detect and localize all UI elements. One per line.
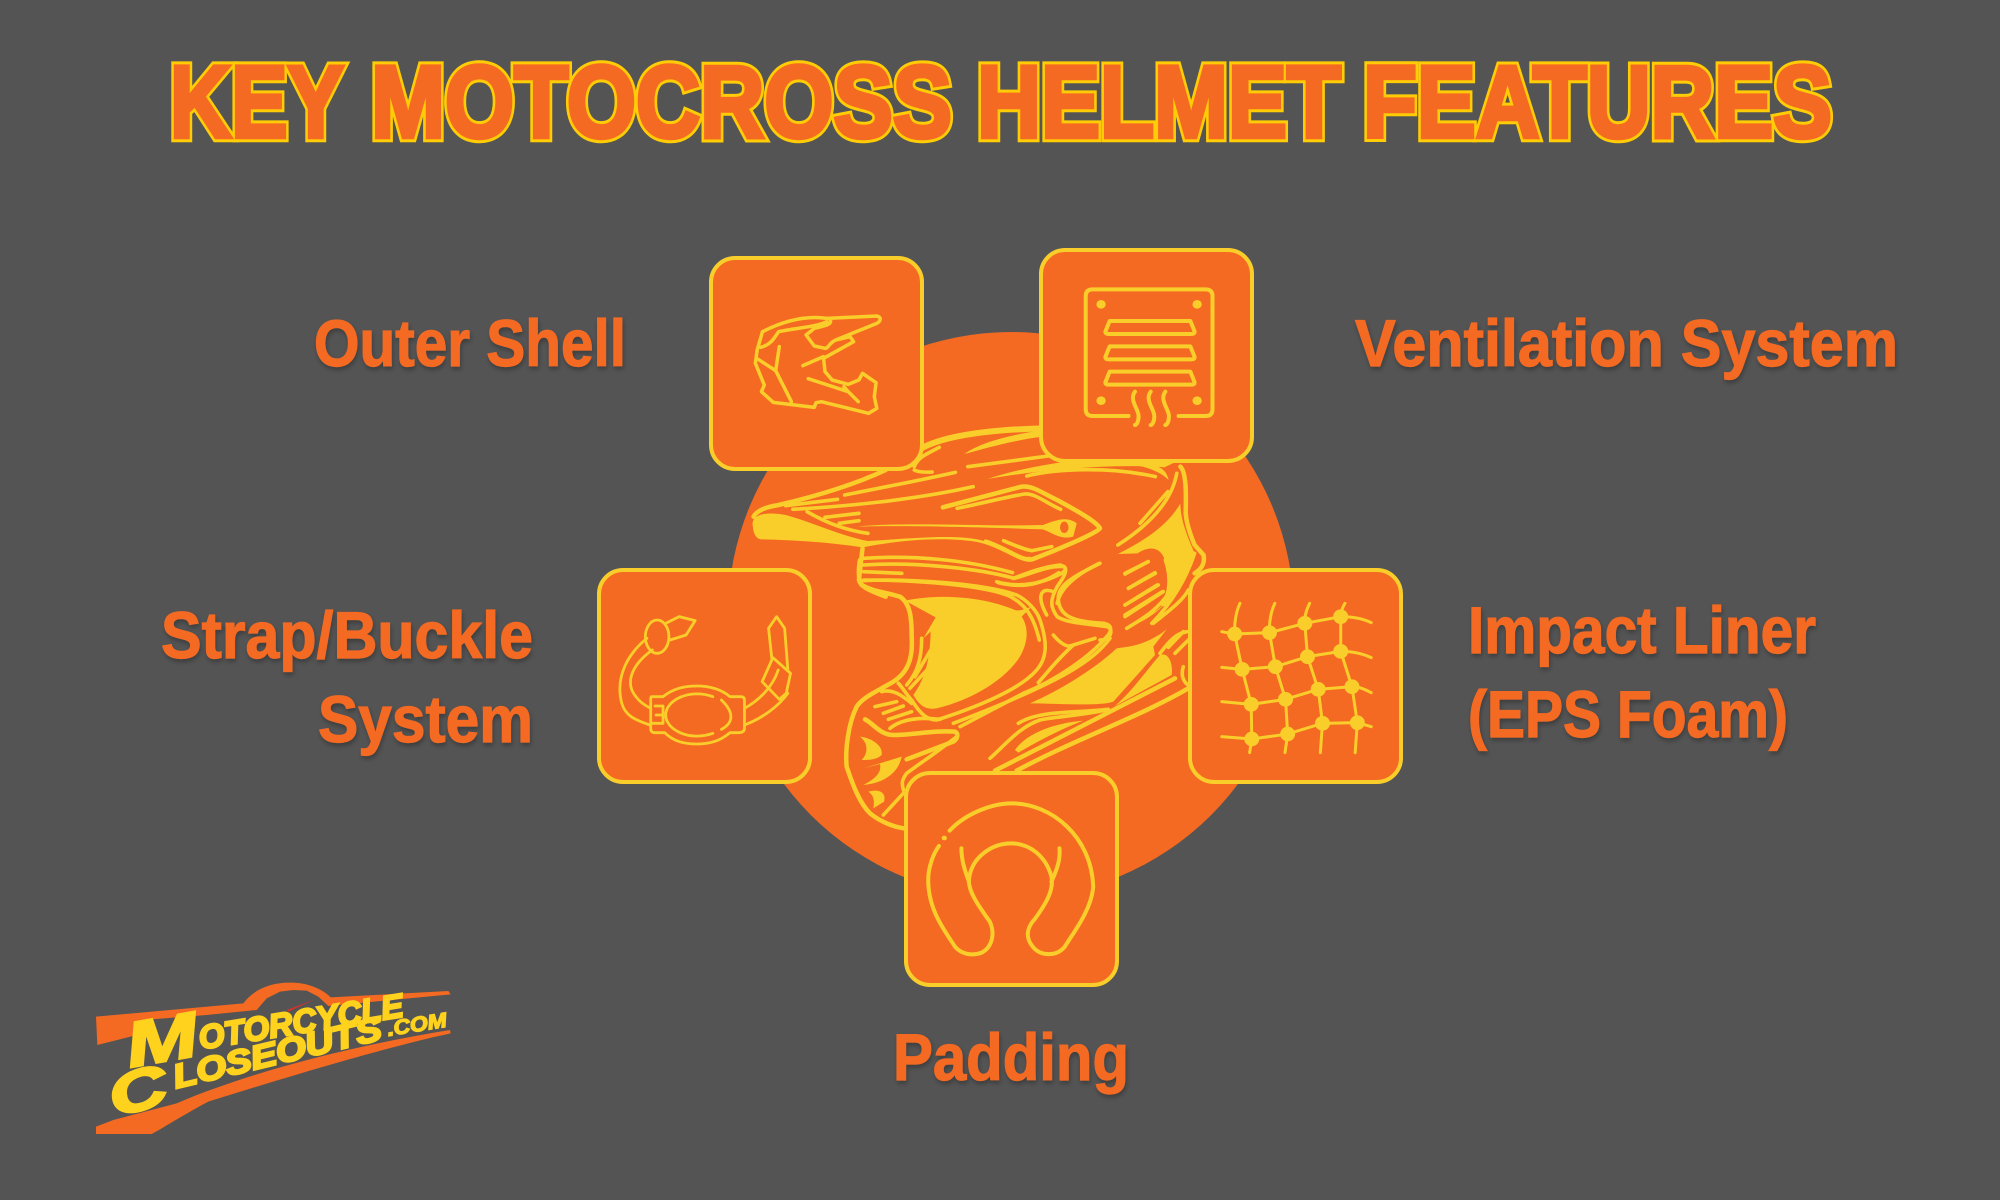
label: padding: Padding bbox=[893, 1020, 1129, 1094]
label: strap/buckle system: System bbox=[318, 682, 533, 756]
logo: Motorcycle Closeouts: .COM bbox=[386, 1009, 449, 1041]
icon card: impact liner bbox=[1190, 570, 1401, 782]
title: MOTOCROSS bbox=[371, 45, 952, 159]
icon card: strap and buckle bbox=[599, 570, 810, 782]
icon card: ventilation system bbox=[1041, 250, 1252, 461]
icon: chin strap bbox=[620, 617, 791, 744]
helmet lower part bbox=[846, 560, 1188, 828]
label: ventilation system: Ventilation System bbox=[1355, 306, 1898, 380]
helmet upper part bbox=[753, 428, 1204, 640]
central orange circle bbox=[728, 332, 1294, 898]
icon: horseshoe pad bbox=[928, 803, 1093, 954]
logo: Motorcycle Closeouts: OTORCYCLE bbox=[196, 987, 408, 1057]
label: strap/buckle system bbox=[161, 598, 533, 756]
logo: Motorcycle Closeouts: M bbox=[120, 999, 205, 1081]
icon: foam mesh bbox=[1222, 603, 1371, 753]
label: impact liner (EPS foam): (EPS Foam) bbox=[1468, 677, 1788, 751]
title: MOTOCROSS bbox=[371, 45, 952, 159]
title: FEATURES bbox=[1363, 45, 1832, 159]
title: KEY bbox=[170, 45, 344, 159]
icon: helmet shell bbox=[755, 316, 880, 413]
title bbox=[170, 45, 1832, 159]
label: outer shell: Outer Shell bbox=[314, 306, 626, 380]
logo: Motorcycle Closeouts: C bbox=[101, 1053, 176, 1130]
icon card: outer shell bbox=[711, 258, 922, 469]
title: HELMET bbox=[977, 45, 1341, 159]
label: strap/buckle system: Strap/Buckle bbox=[161, 598, 533, 672]
helmet illustration bbox=[753, 428, 1204, 828]
icon card: padding bbox=[906, 773, 1117, 985]
title: HELMET bbox=[977, 45, 1341, 159]
label: impact liner (EPS foam): Impact Liner bbox=[1468, 593, 1816, 667]
title: KEY bbox=[170, 45, 344, 159]
logo: Motorcycle Closeouts bbox=[96, 983, 451, 1134]
title: FEATURES bbox=[1363, 45, 1832, 159]
logo: Motorcycle Closeouts: LOSEOUTS bbox=[169, 1011, 385, 1096]
icon: vent panel bbox=[1086, 289, 1212, 425]
label: impact liner (EPS foam) bbox=[1468, 593, 1816, 751]
